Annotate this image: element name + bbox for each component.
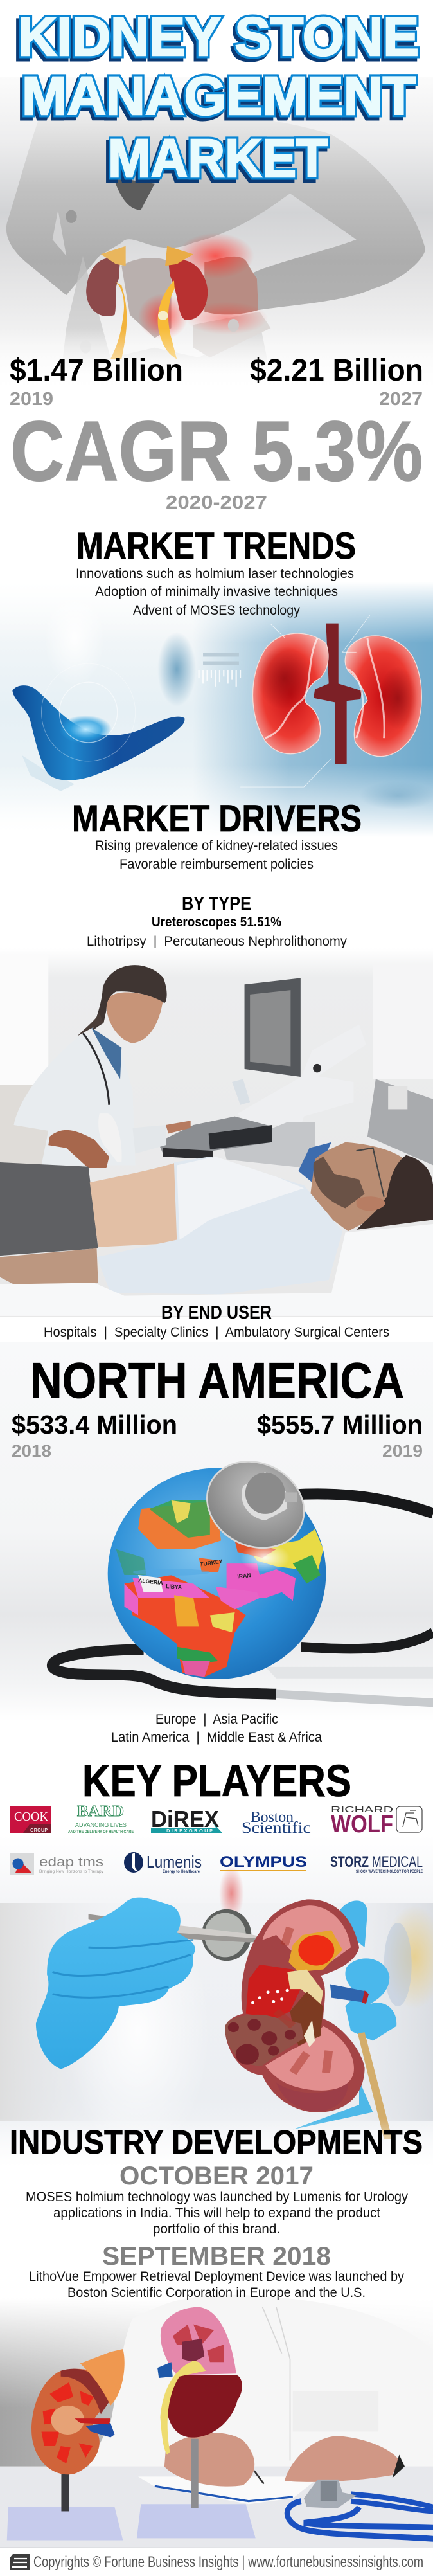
stat: 2019 market size: $1.47 Billion xyxy=(10,354,183,388)
photo: doctor performing ultrasound xyxy=(0,948,433,2576)
logo: Lumenis xyxy=(124,1852,202,1874)
market trends list: Innovations such as holmium laser technologies xyxy=(76,566,354,581)
October 2017 development xyxy=(26,2162,408,2237)
heading: key players: KEY PLAYERS xyxy=(82,1756,351,1806)
title: MARKET xyxy=(108,128,328,188)
left kidney model xyxy=(7,2349,125,2541)
ultrasound machine xyxy=(158,978,366,1168)
title xyxy=(15,6,419,192)
red kidneys xyxy=(252,624,421,764)
market drivers list: Favorable reimbursement policies xyxy=(119,857,314,872)
October 2017 development: OCTOBER 2017 xyxy=(119,2162,314,2190)
hero image: woman holding kidney xyxy=(0,77,433,400)
logo: Boston Scientific: Scientific xyxy=(242,1819,311,1837)
logo: Boston Scientific: Boston xyxy=(251,1809,294,1826)
stat: 2018 regional value: $533.4 Million xyxy=(12,1410,177,1439)
title: KIDNEY STONE xyxy=(18,6,419,67)
market drivers list xyxy=(95,838,338,872)
logo: Lumenis: Energy to Healthcare xyxy=(163,1870,200,1874)
October 2017 development: MOSES holmium technology was launched by Lumenis for Urology xyxy=(26,2190,408,2204)
globe background xyxy=(0,1342,433,1721)
globe xyxy=(108,1468,326,1679)
title: MARKET xyxy=(105,131,325,192)
image band: digital hand and kidneys xyxy=(0,582,433,837)
market drivers list: Rising prevalence of kidney-related issues xyxy=(95,838,338,853)
stethoscope chest piece xyxy=(195,1447,317,1563)
logo: Edap TMS xyxy=(10,1853,104,1875)
by type segment xyxy=(87,894,347,949)
September 2018 development: Boston Scientific Corporation in Europe and the U.S. xyxy=(67,2285,366,2300)
heading: market trends: MARKET TRENDS xyxy=(76,525,356,567)
icon: Fortune Business Insights logo xyxy=(10,2554,30,2570)
logo: Cook Group: GROUP xyxy=(30,1828,48,1833)
forceps xyxy=(89,1914,276,1942)
stat: 2019 market size: 2019 xyxy=(10,389,53,410)
logo: Bard xyxy=(68,1803,134,1834)
logo: Richard Wolf xyxy=(331,1805,422,1838)
logo: Olympus: OLYMPUS xyxy=(220,1853,307,1871)
October 2017 development: applications in India. This will help to expand the product xyxy=(53,2206,380,2220)
title: KIDNEY STONE xyxy=(15,10,416,70)
by end user segment xyxy=(44,1302,389,1340)
stat: 2027 market size xyxy=(250,354,423,410)
doctor xyxy=(14,965,191,1168)
photo: kidney models on doctor's desk xyxy=(0,2295,433,2548)
logo: Edap TMS: Bringing New Horizons to Therapy xyxy=(39,1869,104,1874)
logo: Bard: AND THE DELIVERY OF HEALTH CARE xyxy=(68,1830,134,1834)
market trends list: Adoption of minimally invasive techniques xyxy=(95,584,338,599)
stethoscope tube xyxy=(52,1494,433,1707)
October 2017 development: portfolio of this brand. xyxy=(153,2222,280,2237)
September 2018 development: SEPTEMBER 2018 xyxy=(102,2242,331,2271)
logo: Bard: ADVANCING LIVES xyxy=(75,1822,127,1829)
by type segment: BY TYPE xyxy=(182,894,251,914)
white panel behind developments xyxy=(0,2165,433,2298)
right kidney model xyxy=(137,2307,256,2538)
logo: Direx: DIREXGROUP xyxy=(166,1828,213,1833)
blue stethoscope xyxy=(287,2480,433,2539)
title: MANAGEMENT xyxy=(19,69,413,129)
logo: Lumenis: Lumenis xyxy=(146,1852,202,1871)
stat: 2019 regional value: 2019 xyxy=(382,1441,423,1461)
patient xyxy=(0,1142,433,1316)
globe: LIBYA xyxy=(166,1583,182,1590)
stat: CAGR: 2020-2027 xyxy=(166,492,267,513)
title: MANAGEMENT xyxy=(22,66,416,126)
stethoscope behind xyxy=(202,1909,251,1961)
fingers behind kidney model xyxy=(293,1900,396,2129)
logo: Richard Wolf: RICHARD xyxy=(331,1805,393,1814)
jacket xyxy=(6,109,425,377)
logo: Edap TMS: edap tms xyxy=(39,1855,103,1869)
stat: 2027 market size: $2.21 Billion xyxy=(250,354,423,388)
blue glove xyxy=(36,1898,195,2069)
September 2018 development: LithoVue Empower Retrieval Deployment Device was launched by xyxy=(29,2269,404,2284)
market trends list: Advent of MOSES technology xyxy=(133,603,300,618)
logo: Richard Wolf: WOLF xyxy=(331,1811,393,1838)
footer xyxy=(0,2548,433,2576)
glowing blue hand xyxy=(12,663,184,791)
by end user segment: BY END USER xyxy=(161,1302,272,1323)
title: KIDNEY STONE xyxy=(18,6,419,67)
logo: Direx: DiREX xyxy=(151,1806,219,1832)
regions list xyxy=(111,1712,322,1745)
stat: 2019 regional value: $555.7 Million xyxy=(257,1410,423,1439)
title: MARKET xyxy=(108,128,328,188)
stat: 2019 market size xyxy=(10,354,183,410)
stat: 2018 regional value xyxy=(12,1410,177,1461)
logo: Cook Group: COOK xyxy=(14,1810,49,1824)
kidney illustrations xyxy=(86,246,208,359)
September 2018 development xyxy=(29,2242,404,2300)
stat: 2018 regional value: 2018 xyxy=(12,1441,51,1461)
hands with pain glow xyxy=(66,210,270,357)
logo: Boston Scientific xyxy=(242,1809,311,1837)
title: MANAGEMENT xyxy=(22,66,416,126)
by type segment: Lithotripsy | Percutaneous Nephrolithonomy xyxy=(87,934,347,949)
photo: gloved hand and kidney model xyxy=(0,1835,433,2165)
heading: market drivers: MARKET DRIVERS xyxy=(72,798,362,840)
by end user segment: Hospitals | Specialty Clinics | Ambulatory Surgical Centers xyxy=(44,1325,389,1340)
data readout xyxy=(199,653,240,687)
doctor coat and hands xyxy=(0,2295,433,2548)
regions list: Latin America | Middle East & Africa xyxy=(111,1730,322,1745)
globe: ALGERIA xyxy=(138,1577,164,1586)
globe: IRAN xyxy=(237,1572,251,1580)
kidney model xyxy=(225,1899,393,2139)
stat: 2019 regional value xyxy=(257,1410,423,1461)
stat: 2027 market size: 2027 xyxy=(379,389,423,410)
logo: Bard: BARD xyxy=(77,1803,124,1820)
regions list: Europe | Asia Pacific xyxy=(155,1712,278,1727)
illustration: globe with stethoscope xyxy=(52,1447,433,1707)
by type segment: Ureteroscopes 51.51% xyxy=(152,915,281,930)
market trends list xyxy=(76,566,354,618)
globe: TURKEY xyxy=(200,1558,223,1568)
logo: Cook Group xyxy=(10,1806,51,1833)
